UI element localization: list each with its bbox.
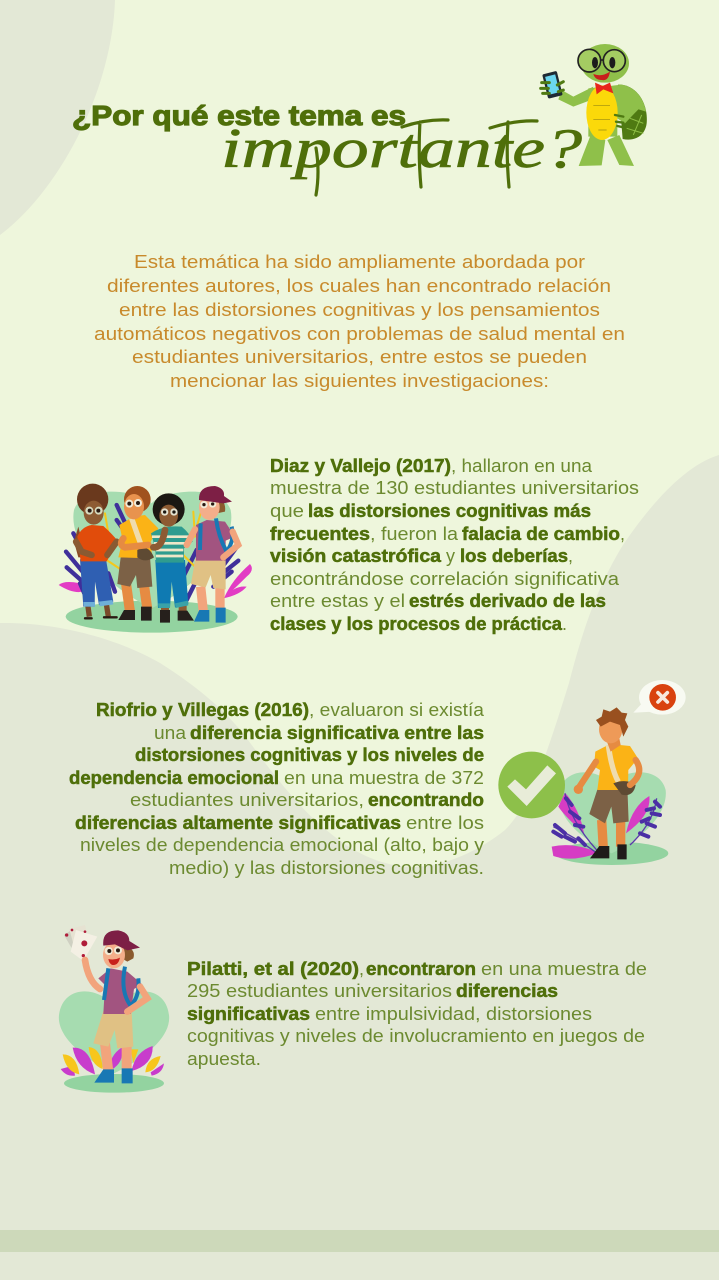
text block: Pilatti: en una muestra de	[481, 959, 647, 979]
student 4	[187, 486, 238, 623]
student 1	[74, 484, 118, 618]
title: importante?	[221, 118, 582, 180]
text block: Diaz y Vallejo: entre estas y el	[270, 591, 405, 611]
text block: Riofrio y Villegas: diferencias altamente significativas	[75, 813, 401, 833]
text block: Pilatti: ,	[359, 959, 364, 979]
intro text: diferentes autores, los cuales han encontrado relación	[107, 276, 611, 296]
heart background	[559, 772, 666, 853]
student 3	[151, 493, 194, 623]
text block: Pilatti	[187, 959, 647, 1069]
text block: Riofrio y Villegas: Riofrio y Villegas (2016)	[96, 700, 309, 720]
illustration: group of four students	[59, 484, 252, 633]
student	[85, 930, 147, 1083]
text block: Diaz y Vallejo: .	[562, 614, 567, 634]
illustration: student with check mark and speech bubble	[498, 680, 686, 865]
icon: check mark badge	[498, 752, 565, 818]
text block: Riofrio y Villegas: diferencia significativa entre las	[190, 723, 484, 743]
text block: Pilatti: Pilatti, et al (2020)	[187, 959, 359, 979]
intro text: estudiantes universitarios, entre estos se pueden	[132, 347, 587, 367]
text block: Pilatti: cognitivas y niveles de involucramiento en juegos de	[187, 1026, 645, 1046]
ground ellipse	[555, 842, 668, 865]
title	[72, 100, 582, 195]
text block: Diaz y Vallejo: clases y los procesos de práctica	[270, 614, 563, 634]
ground ellipse	[66, 601, 238, 633]
student	[574, 707, 639, 859]
text block: Diaz y Vallejo: que	[270, 501, 304, 521]
icon: turtle mascot with phone	[541, 44, 647, 166]
text block: Diaz y Vallejo: falacia de cambio	[462, 524, 620, 544]
text block: Riofrio y Villegas: distorsiones cognitivas y los niveles de	[135, 745, 484, 765]
cards	[64, 925, 97, 961]
intro text: entre las distorsiones cognitivas y los pensamientos	[119, 300, 600, 320]
title: ¿Por qué este tema es	[72, 100, 406, 131]
text block: Pilatti: apuesta.	[187, 1049, 261, 1069]
text block: Riofrio y Villegas: encontrando	[368, 790, 484, 810]
text block: Diaz y Vallejo: las distorsiones cognitivas más	[308, 501, 591, 521]
text block: Diaz y Vallejo: , fueron la	[370, 524, 459, 544]
text block: Diaz y Vallejo	[270, 456, 639, 634]
text block: Diaz y Vallejo: y	[446, 546, 455, 566]
text block: Pilatti: 295 estudiantes universitarios	[187, 981, 452, 1001]
text block: Pilatti: entre impulsividad, distorsiones	[315, 1004, 592, 1024]
illustration: student holding cards	[59, 925, 169, 1093]
text block: Riofrio y Villegas: en una muestra de 372	[284, 768, 484, 788]
foliage	[552, 793, 660, 859]
heart background	[59, 991, 169, 1073]
text block: Diaz y Vallejo: ,	[620, 524, 625, 544]
text block: Riofrio y Villegas	[69, 700, 485, 878]
text block: Diaz y Vallejo: muestra de 130 estudiantes universitarios	[270, 478, 639, 498]
foliage	[59, 505, 252, 600]
intro text: automáticos negativos con problemas de salud mental en	[94, 324, 625, 344]
speech bubble with cross	[633, 680, 686, 715]
text block: Riofrio y Villegas: entre los	[406, 813, 484, 833]
text block: Riofrio y Villegas: una	[154, 723, 187, 743]
text block: Pilatti: diferencias	[456, 981, 558, 1001]
text block: Diaz y Vallejo: visión catastrófica	[270, 546, 442, 566]
text block: Riofrio y Villegas: niveles de dependencia emocional (alto, bajo y	[80, 835, 484, 855]
text block: Riofrio y Villegas: estudiantes universitarios,	[130, 790, 364, 810]
text block: Diaz y Vallejo: ,	[568, 546, 573, 566]
text block: Diaz y Vallejo: los deberías	[460, 546, 568, 566]
student 2	[117, 486, 158, 621]
foliage	[61, 1046, 164, 1076]
ground ellipse	[64, 1074, 164, 1093]
text block: Diaz y Vallejo: encontrándose correlación significativa	[270, 569, 620, 589]
intro text: Esta temática ha sido ampliamente abordada por	[134, 252, 585, 272]
text block: Diaz y Vallejo: , hallaron en una	[451, 456, 593, 476]
text block: Diaz y Vallejo: frecuentes	[270, 524, 370, 544]
text block: Riofrio y Villegas: medio) y las distorsiones cognitivas.	[169, 858, 484, 878]
intro text	[94, 252, 625, 391]
text block: Diaz y Vallejo: estrés derivado de las	[409, 591, 606, 611]
intro text: mencionar las siguientes investigaciones:	[170, 371, 549, 391]
text block: Pilatti: encontraron	[366, 959, 476, 979]
text block: Pilatti: significativas	[187, 1004, 310, 1024]
text block: Diaz y Vallejo: Diaz y Vallejo (2017)	[270, 456, 451, 476]
heart background	[73, 492, 231, 608]
text block: Riofrio y Villegas: , evaluaron si existía	[309, 700, 485, 720]
text block: Riofrio y Villegas: dependencia emocional	[69, 768, 279, 788]
